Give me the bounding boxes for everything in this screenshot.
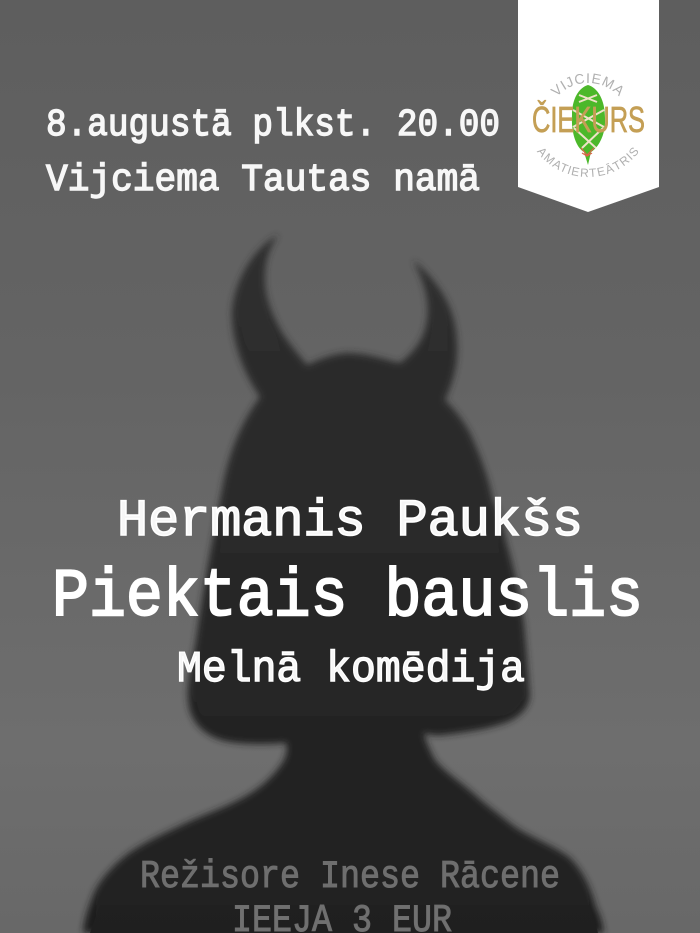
play title block [52, 492, 643, 695]
date and venue [46, 104, 500, 202]
logo wordmark: ČIEKURS [532, 99, 645, 140]
genre: Melnā komēdija [177, 645, 525, 695]
director: Režisore Inese Rācene [140, 855, 560, 899]
banner with logo [518, 0, 659, 212]
banner shape [518, 0, 659, 212]
venue: Vijciema Tautas namā [46, 159, 480, 202]
icon: green pine cone [572, 85, 605, 165]
title: Piektais bauslis [52, 559, 643, 636]
silhouette: horned figure [83, 235, 604, 933]
date: 8.augustā plkst. 20.00 [46, 104, 500, 147]
logo ring text bottom: AMATIERTEĀTRIS [536, 148, 638, 178]
credits [140, 855, 560, 933]
logo ring text top: VIJCIEMA [550, 73, 622, 96]
author: Hermanis Paukšs [117, 492, 583, 551]
